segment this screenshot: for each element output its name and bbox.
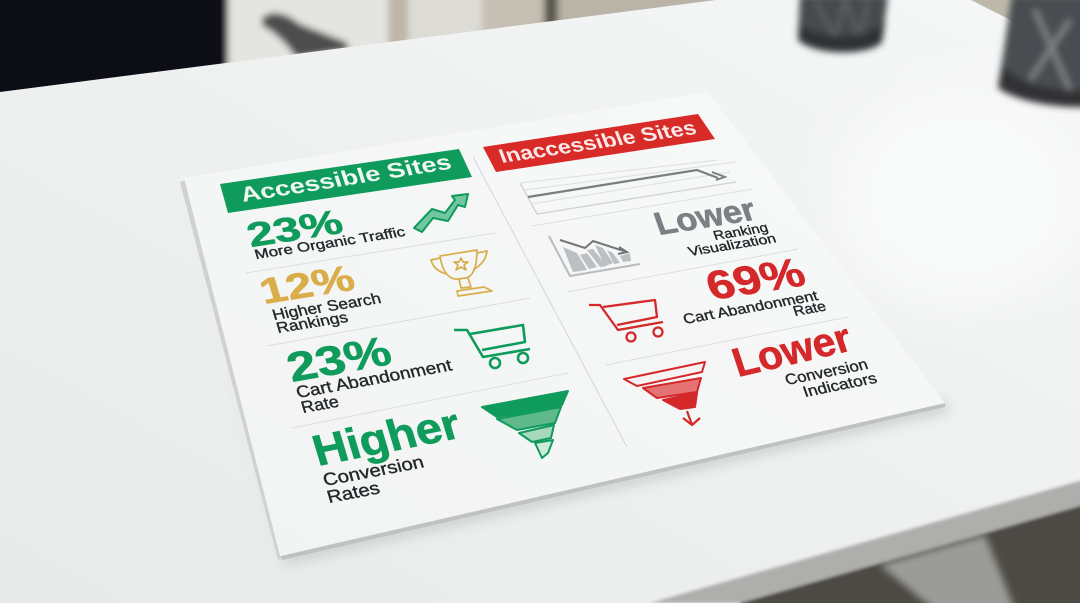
stat: higher conversion rates: Conversion: [320, 451, 426, 490]
background: desk front edge and legs: [650, 478, 1080, 603]
stat: 69% cart abandonment rate: 69%: [700, 249, 811, 309]
icon: red cart: [589, 300, 663, 342]
chart: ranking line graph: [520, 160, 736, 214]
heading: Inaccessible Sites: [483, 114, 715, 172]
stat: 23% cart abandonment rate: 23%: [281, 328, 397, 391]
stat: lower ranking visualization: Ranking: [711, 220, 770, 243]
pencil holder right: [998, 0, 1080, 107]
icon: green cart: [454, 325, 530, 368]
stat: higher conversion rates: Rates: [324, 478, 382, 507]
stat: 23% more organic traffic: More Organic Traffic: [252, 224, 407, 262]
stat: higher conversion rates: Higher: [307, 400, 466, 476]
stat: 23% more organic traffic: [242, 203, 407, 262]
stat: 23% cart abandonment rate: Cart Abandonment: [294, 356, 455, 402]
stat: 12% higher search rankings: Higher Search: [270, 291, 383, 324]
stat: lower ranking visualization: [649, 191, 778, 259]
stat: 69% cart abandonment rate: [681, 249, 828, 327]
desk highlights: [830, 90, 1080, 310]
shadow of paper: [190, 200, 950, 565]
panel: paper sheet: [180, 92, 945, 560]
stat: 23% cart abandonment rate: Rate: [299, 393, 341, 417]
icon: trophy: [431, 250, 492, 296]
stat: lower conversion indicators: [726, 314, 879, 401]
stat: 69% cart abandonment rate: Rate: [791, 298, 828, 319]
background: office behind desk: [0, 0, 1080, 110]
stat: 23% more organic traffic: 23%: [242, 203, 347, 255]
heading: Inaccessible Sites: Inaccessible Sites: [496, 117, 700, 168]
heading: Accessible Sites: [220, 149, 472, 213]
icon: green funnel: [482, 391, 568, 458]
stat: 12% higher search rankings: 12%: [254, 257, 359, 312]
stat: 23% cart abandonment rate: [281, 328, 455, 417]
stat: 69% cart abandonment rate: Cart Abandonment: [681, 287, 820, 327]
stat: lower conversion indicators: Conversion: [783, 356, 870, 389]
stat: lower ranking visualization: Lower: [649, 191, 761, 242]
stat: higher conversion rates: [307, 400, 466, 507]
pencil holder left: [798, 0, 888, 52]
stat: lower conversion indicators: Lower: [726, 314, 857, 386]
heading: Accessible Sites: Accessible Sites: [237, 151, 455, 207]
icon: falling bar chart: [549, 236, 640, 276]
stat: 12% higher search rankings: [254, 257, 383, 337]
stat: lower conversion indicators: Indicators: [801, 370, 879, 401]
stat: lower ranking visualization: Visualization: [686, 231, 778, 259]
icon: rising arrow: [414, 194, 468, 232]
icon: red funnel: [624, 362, 705, 425]
stat: 12% higher search rankings: Rankings: [274, 310, 350, 337]
